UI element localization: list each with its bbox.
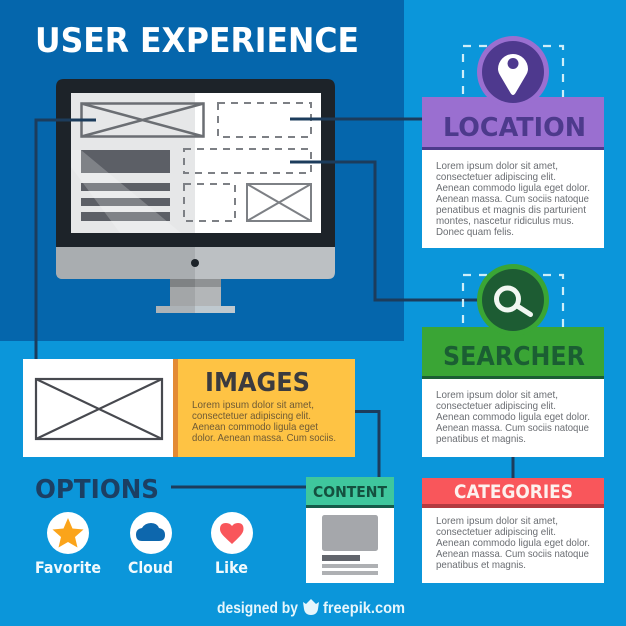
text block: consectetuer adipiscing elit.	[192, 410, 311, 422]
content thumbnail	[322, 515, 378, 575]
text block	[436, 389, 590, 445]
text block: Lorem ipsum dolor sit amet,	[436, 515, 558, 527]
text block: dolor. Aenean massa. Cum sociis.	[192, 432, 336, 444]
text block: Lorem ipsum dolor sit amet,	[436, 389, 558, 401]
text block: Aenean commodo ligula eget dolor.	[436, 411, 590, 423]
wireframe: top image	[82, 104, 204, 136]
panel: categories	[422, 478, 604, 583]
text block: Aenean massa. Cum sociis natoque	[436, 422, 589, 434]
text block: consectetuer adipiscing elit.	[436, 400, 556, 412]
panel: images	[23, 359, 355, 457]
icon: cloud	[136, 523, 165, 541]
heading: LOCATION	[443, 113, 586, 143]
text block: Aenean commodo ligula eget dolor.	[436, 537, 590, 549]
icon: freepik logo	[303, 599, 319, 615]
text block: Lorem ipsum dolor sit amet,	[192, 399, 314, 411]
monitor	[56, 79, 335, 313]
footer: freepik credit: designed by	[217, 600, 298, 617]
heading: CATEGORIES	[454, 481, 573, 503]
text block: penatibus et magnis.	[436, 559, 526, 571]
wireframe: dashed placeholders	[184, 103, 311, 221]
footer: freepik credit: freepik.com	[323, 600, 405, 617]
wireframe: small image	[247, 184, 311, 221]
option: cloud	[128, 512, 173, 577]
dashed frame	[463, 275, 563, 335]
wireframe: text bars	[81, 183, 170, 221]
text block: Lorem ipsum dolor sit amet,	[436, 160, 558, 172]
text block: penatibus et magnis.	[436, 433, 526, 445]
panel: searcher	[422, 264, 604, 457]
option: like: Like	[215, 558, 248, 577]
text block	[192, 399, 336, 444]
icon: heart	[220, 523, 244, 544]
dashed frame	[463, 46, 563, 106]
option: favorite: Favorite	[35, 558, 101, 577]
option: cloud: Cloud	[128, 558, 173, 577]
text block: montes, nascetur ridiculus mus.	[436, 215, 574, 227]
heading: IMAGES	[205, 368, 310, 398]
heading: CONTENT	[313, 483, 388, 501]
text block: consectetuer adipiscing elit.	[436, 526, 556, 538]
text block: Aenean commodo ligula eget	[192, 421, 318, 433]
title: USER EXPERIENCE	[35, 21, 359, 61]
text block: consectetuer adipiscing elit.	[436, 171, 556, 183]
text block: Aenean massa. Cum sociis natoque	[436, 548, 589, 560]
text block: Donec quam felis.	[436, 226, 514, 238]
heading: options: OPTIONS	[35, 475, 159, 505]
icon: magnifier	[477, 264, 549, 336]
text block: Aenean massa. Cum sociis natoque	[436, 193, 589, 205]
text block: Aenean commodo ligula eget dolor.	[436, 182, 590, 194]
text block	[436, 515, 590, 571]
text block: penatibus et magnis dis parturient	[436, 204, 586, 216]
footer: freepik credit	[217, 599, 405, 617]
panel: location	[422, 36, 604, 248]
wireframe: dark text block	[81, 150, 170, 173]
heading: SEARCHER	[443, 342, 585, 372]
icon: location pin	[477, 36, 549, 108]
connector lines	[36, 119, 513, 487]
icon: star	[52, 518, 84, 548]
option: like	[211, 512, 253, 577]
panel: content	[306, 477, 394, 583]
text block	[436, 160, 590, 238]
icon: image placeholder	[36, 379, 162, 439]
option: favorite	[35, 512, 101, 577]
